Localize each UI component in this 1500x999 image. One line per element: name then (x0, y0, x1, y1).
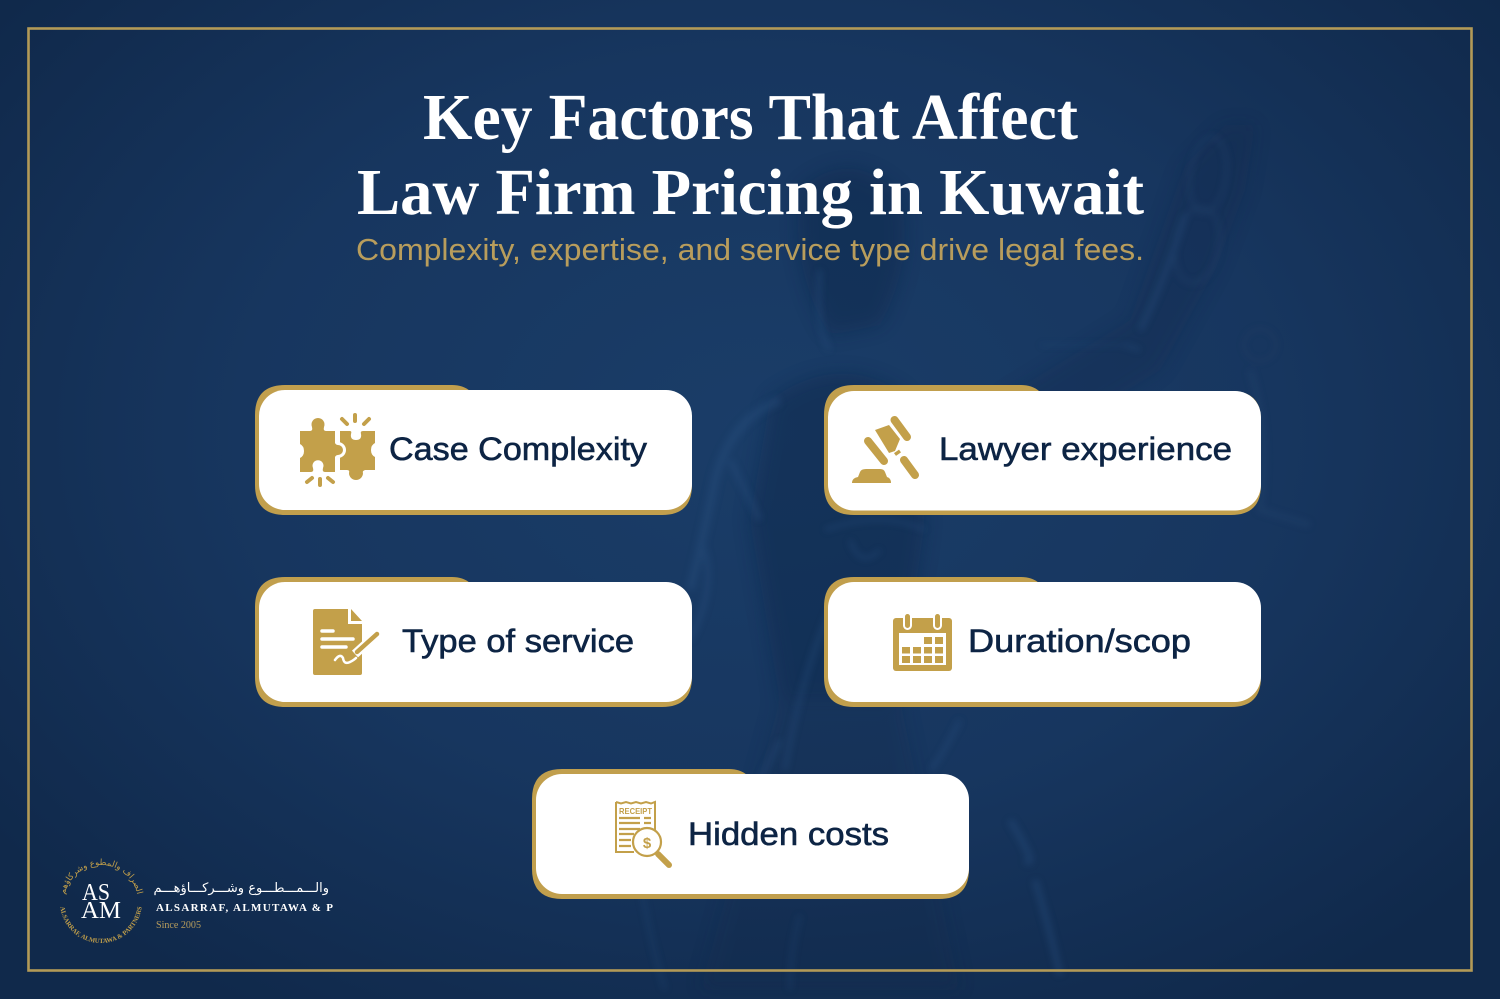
card: type of service (255, 577, 692, 707)
icon: puzzle pieces (300, 415, 375, 485)
title (357, 81, 1144, 229)
icon: receipt with magnifier: RECEIPT (619, 806, 653, 816)
icon: calendar (893, 613, 952, 671)
card: case complexity (255, 385, 692, 515)
logo emblem: AM (81, 898, 121, 924)
icon: receipt with magnifier (616, 802, 669, 865)
logo since line: Since 2005 (156, 920, 201, 931)
logo Arabic name: والـــمـــطـــوع وشـــركـــاؤهـــم (154, 881, 329, 896)
logo emblem (60, 858, 144, 943)
card: lawyer experience (824, 385, 1261, 515)
label: Type of service: Type of service (402, 623, 634, 659)
icon: document with signature (313, 609, 378, 675)
title: Law Firm Pricing in Kuwait (357, 156, 1144, 229)
icon: receipt with magnifier: $ (643, 835, 652, 852)
card: hidden costs (532, 769, 969, 899)
subtitle: Complexity, expertise, and service type drive legal fees. (356, 232, 1144, 267)
statue of Lady Justice watermark (640, 125, 1310, 990)
logo emblem: ALSARRAF, ALMUTAWA & PARTNERS (60, 906, 142, 943)
title: Key Factors That Affect (423, 81, 1078, 154)
firm logo (60, 858, 333, 943)
label: Case Complexity: Case Complexity (389, 431, 647, 467)
label: Lawyer experience: Lawyer experience (939, 431, 1232, 467)
logo emblem: الصراف والمطوع وشركاؤهم (62, 858, 144, 894)
icon: gavel (852, 420, 915, 483)
card: duration/scope (824, 577, 1261, 707)
label: Hidden costs: Hidden costs (688, 816, 889, 852)
logo English name: ALSARRAF, ALMUTAWA & P (156, 902, 333, 914)
label: Duration/scop: Duration/scop (968, 623, 1191, 659)
logo emblem: AS (82, 880, 110, 906)
